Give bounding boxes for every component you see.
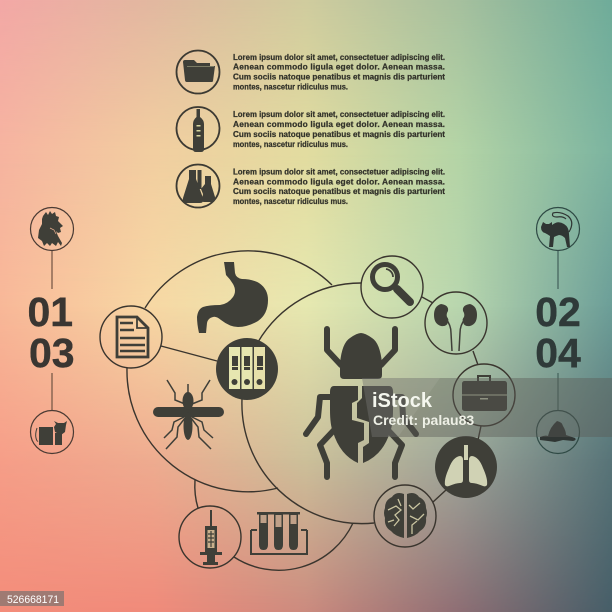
text block 3: Aenean commodo ligula eget dolor. Aenean massa.	[233, 176, 445, 186]
large circle outline: stomach and mosquito group	[127, 251, 332, 492]
left column: 01 and 03 with animal icons	[28, 208, 75, 454]
node: brain	[374, 485, 436, 547]
icon: flasks	[176, 164, 220, 208]
text block 3: Cum sociis natoque penatibus et magnis dis parturient	[233, 186, 445, 196]
text block 3: montes, nascetur ridiculus mus.	[233, 196, 348, 206]
icon: turtle	[536, 410, 580, 454]
node: magnifier	[361, 256, 423, 318]
top list: three text items with icons	[176, 50, 445, 208]
node: lungs	[435, 436, 497, 498]
node: kidneys	[425, 292, 487, 354]
circle network diagram	[100, 251, 515, 570]
icon: stomach	[197, 262, 268, 333]
text block 2: Aenean commodo ligula eget dolor. Aenean massa.	[233, 119, 445, 129]
icon: black cat	[536, 208, 580, 250]
number 04: 04	[535, 330, 581, 376]
icon: beetle	[306, 329, 416, 477]
watermark: iStock: iStock	[372, 390, 433, 412]
number 02: 02	[535, 289, 581, 335]
right column: 02 and 04 with animal icons	[535, 208, 581, 454]
small circle outline: bottom group	[195, 480, 353, 570]
icon: test tubes in rack	[251, 512, 307, 554]
text block 2: Lorem ipsum dolor sit amet, consectetuer adipiscing elit.	[233, 109, 445, 119]
connector lines between nodes	[161, 297, 481, 502]
node: syringe	[179, 506, 241, 568]
large circle outline: beetle group	[242, 283, 374, 524]
text block 1: Aenean commodo ligula eget dolor. Aenean massa.	[233, 62, 445, 72]
node: document	[100, 306, 162, 368]
text block 1: Lorem ipsum dolor sit amet, consectetuer adipiscing elit.	[233, 52, 445, 62]
text block 1	[233, 52, 445, 92]
icon: bottle	[176, 107, 220, 152]
text block 2: montes, nascetur ridiculus mus.	[233, 139, 348, 149]
icon: mosquito	[153, 380, 224, 449]
icon: rooster	[30, 208, 74, 250]
connector line	[557, 373, 559, 411]
watermark: credit: Credit: palau83	[373, 412, 474, 428]
node: binders	[216, 338, 278, 400]
connector line	[557, 251, 559, 289]
text block 3	[233, 166, 445, 206]
icon: folder	[176, 50, 220, 94]
text block 1: montes, nascetur ridiculus mus.	[233, 82, 348, 92]
text block 3: Lorem ipsum dolor sit amet, consectetuer adipiscing elit.	[233, 166, 445, 176]
text block 2: Cum sociis natoque penatibus et magnis dis parturient	[233, 129, 445, 139]
connector line	[51, 251, 53, 289]
text block 2	[233, 109, 445, 149]
icon: cow	[30, 410, 74, 454]
node: briefcase	[453, 364, 515, 426]
connector line	[51, 373, 53, 411]
image number tag: 526668171	[7, 594, 59, 606]
text block 1: Cum sociis natoque penatibus et magnis dis parturient	[233, 72, 445, 82]
number 03: 03	[29, 330, 75, 376]
image number tag	[0, 591, 64, 606]
number 01: 01	[28, 289, 73, 335]
watermark band	[362, 378, 612, 437]
